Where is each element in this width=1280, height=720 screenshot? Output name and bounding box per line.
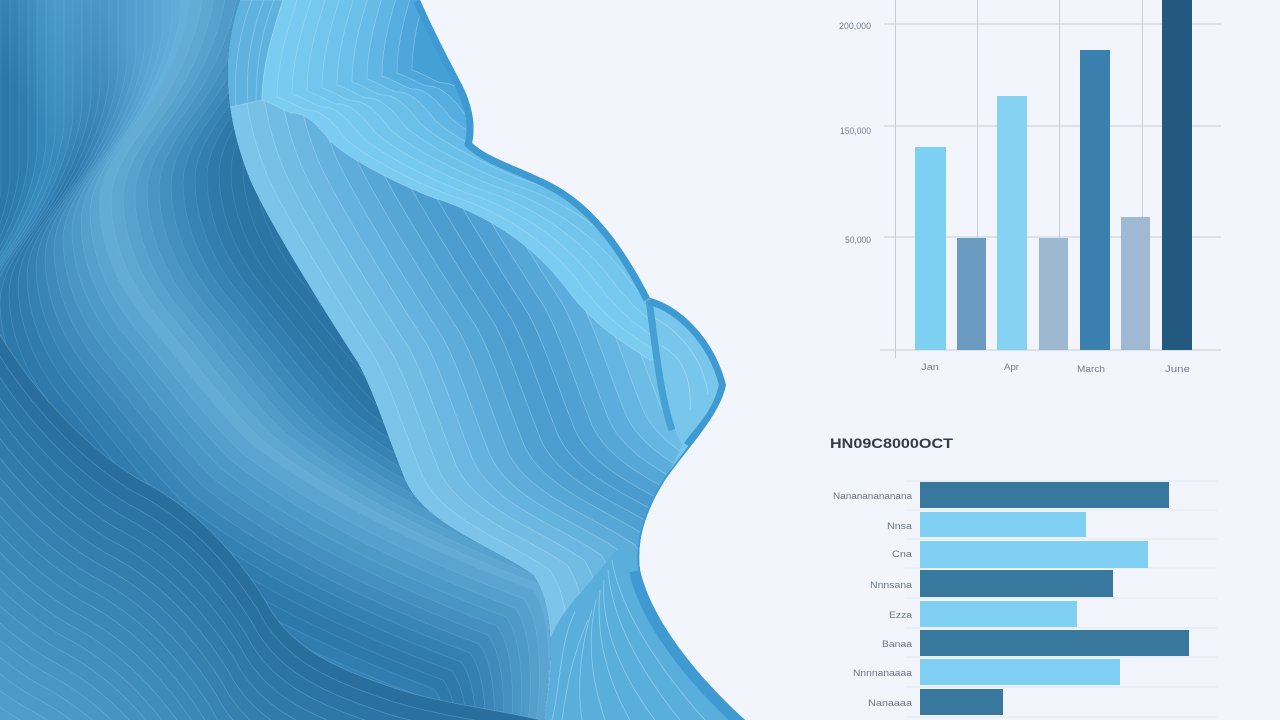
bar row 3 xyxy=(920,541,1148,568)
y-axis labels xyxy=(839,21,871,245)
wave: light body sheets xyxy=(228,0,745,720)
bar row 7 xyxy=(920,659,1120,685)
chart: vertical bar chart xyxy=(839,0,1221,374)
wave: bottom flare below the waist xyxy=(544,550,745,720)
bar 5 xyxy=(1080,50,1110,350)
wave: top strip beside the light fold xyxy=(224,0,283,108)
bar 6 xyxy=(1121,217,1150,350)
wave: top light fold sheets xyxy=(262,0,654,360)
row labels xyxy=(833,491,912,708)
bar 1 xyxy=(915,147,946,350)
bar 4 xyxy=(1039,238,1068,350)
x-axis labels: March xyxy=(1077,364,1105,374)
wave: bump divider band xyxy=(649,300,672,430)
wave: bump inner lines xyxy=(655,318,708,410)
illustration: layered blue wave xyxy=(0,0,745,720)
wave: outer rim xyxy=(420,0,745,720)
bar row 6 xyxy=(920,630,1189,656)
x-axis labels: Jan xyxy=(921,362,939,372)
row labels: Nnnnanaaaa xyxy=(853,668,912,678)
wave: deep shadow fold sheets xyxy=(99,0,550,720)
bar row 2 xyxy=(920,512,1086,537)
heading: horizontal chart title: HN09C8000OCT xyxy=(830,435,954,451)
y-axis labels: 200,000 xyxy=(839,21,871,31)
x-axis labels: Apr xyxy=(1004,362,1019,372)
wave: lower left sheets xyxy=(0,334,541,720)
row labels: Ezza xyxy=(889,610,912,620)
row labels: Nanaaaa xyxy=(868,698,912,708)
x-axis labels: June xyxy=(1165,364,1190,374)
bar 7 xyxy=(1162,0,1192,350)
bar 2 xyxy=(957,238,986,350)
wave: flare fan lines xyxy=(552,560,705,720)
y-axis labels: 150,000 xyxy=(840,126,871,136)
row labels: Banaa xyxy=(882,639,912,649)
row labels: Nanananananana xyxy=(833,491,912,501)
bar row 8 xyxy=(920,689,1003,715)
chart: horizontal bar chart xyxy=(833,481,1217,717)
bar row 4 xyxy=(920,570,1113,597)
wave: bump fold behind the body xyxy=(650,298,726,478)
row labels: Cna xyxy=(892,549,912,559)
x-axis labels xyxy=(921,362,1190,374)
bar row 1 xyxy=(920,482,1169,508)
bar row 5 xyxy=(920,601,1077,627)
wave: left fold sheets xyxy=(0,0,548,720)
bar 3 xyxy=(997,96,1027,350)
wave: top left highlight xyxy=(0,0,190,148)
row labels: Nnsa xyxy=(887,521,912,531)
wave: top strip lines xyxy=(235,0,274,106)
y-axis labels: 50,000 xyxy=(845,235,871,245)
row labels: Nnnsana xyxy=(870,580,912,590)
